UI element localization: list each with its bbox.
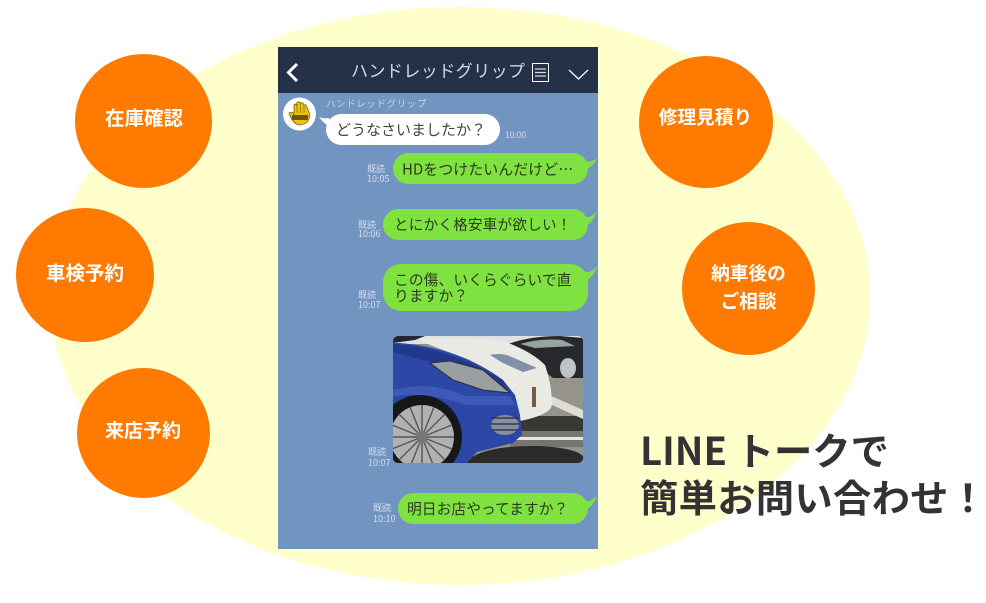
read mark 10:07: 既読 [358,288,376,301]
sender name: ハンドレッドグリップ [326,96,427,110]
timestamp 10:00: 10:00 [505,129,527,141]
read mark 10:05: 既読 [367,162,385,175]
read mark 10:10: 10:10 [373,512,395,525]
panel: chat screen [278,47,598,549]
circle: 納車後のご相談 [682,222,815,355]
read mark 10:05: 10:05 [367,172,389,185]
black car [508,336,583,378]
circle: 車検予約 [16,208,154,342]
circle: 在庫確認 [75,54,212,188]
heading: 簡単お問い合わせ！ [640,469,986,524]
read mark 10:10: 既読 [373,501,391,514]
read mark 10:07 photo [368,445,390,469]
chat header bar: ハンドレッドグリップ [351,57,526,82]
bubble: 明日お店やってますか？: 明日お店やってますか？ [407,498,568,519]
read mark 10:06: 既読 [358,218,376,231]
circle: 修理見積り: 修理見積り [659,103,752,130]
read mark 10:06 [358,218,380,240]
read mark 10:07 photo: 既読 [368,445,386,458]
read mark 10:10 [373,501,395,525]
chat header bar [278,47,598,93]
circle: 在庫確認: 在庫確認 [105,102,183,131]
bubble: 明日お店やってますか？ [398,493,597,524]
bubble: HDをつけたいんだけど…: HDをつけたいんだけど… [402,158,573,180]
ground [393,336,583,463]
icon: shop avatar hand [283,98,316,130]
bubble: とにかく格安車が欲しい！: とにかく格安車が欲しい！ [394,214,572,235]
bubble: HDをつけたいんだけど… [393,153,597,184]
read mark 10:06: 10:06 [358,227,380,240]
white car [417,338,552,421]
read mark 10:07: 10:07 [358,298,380,311]
circle: 修理見積り [639,56,773,188]
circle: 車検予約: 車検予約 [46,257,124,286]
wheel [393,395,462,463]
heading: LINE トークで [640,422,889,477]
circle: 納車後のご相談: 納車後の [711,259,786,286]
blue car [393,343,522,463]
read mark 10:07 photo: 10:07 [368,456,390,469]
bubble: この傷、いくらぐらいで直りますか？ [383,264,597,311]
read mark 10:05 [367,162,389,185]
circle: 納車後のご相談: ご相談 [720,287,777,314]
circle: 来店予約 [77,368,210,498]
bubble: この傷、いくらぐらいで直りますか？: この傷、いくらぐらいで直 [394,269,572,290]
background ellipse [50,7,870,585]
photo: blue and white cars [393,336,583,463]
bubble: どうなさいましたか？ [319,114,500,145]
bubble: この傷、いくらぐらいで直りますか？: りますか？ [394,285,468,306]
read mark 10:07 [358,288,380,311]
blue car fog lamp [491,415,519,435]
bubble: とにかく格安車が欲しい！ [383,209,597,240]
circle: 来店予約: 来店予約 [105,416,181,443]
bubble: どうなさいましたか？: どうなさいましたか？ [336,119,486,140]
blue car headlight [430,361,510,393]
heading [640,422,986,524]
